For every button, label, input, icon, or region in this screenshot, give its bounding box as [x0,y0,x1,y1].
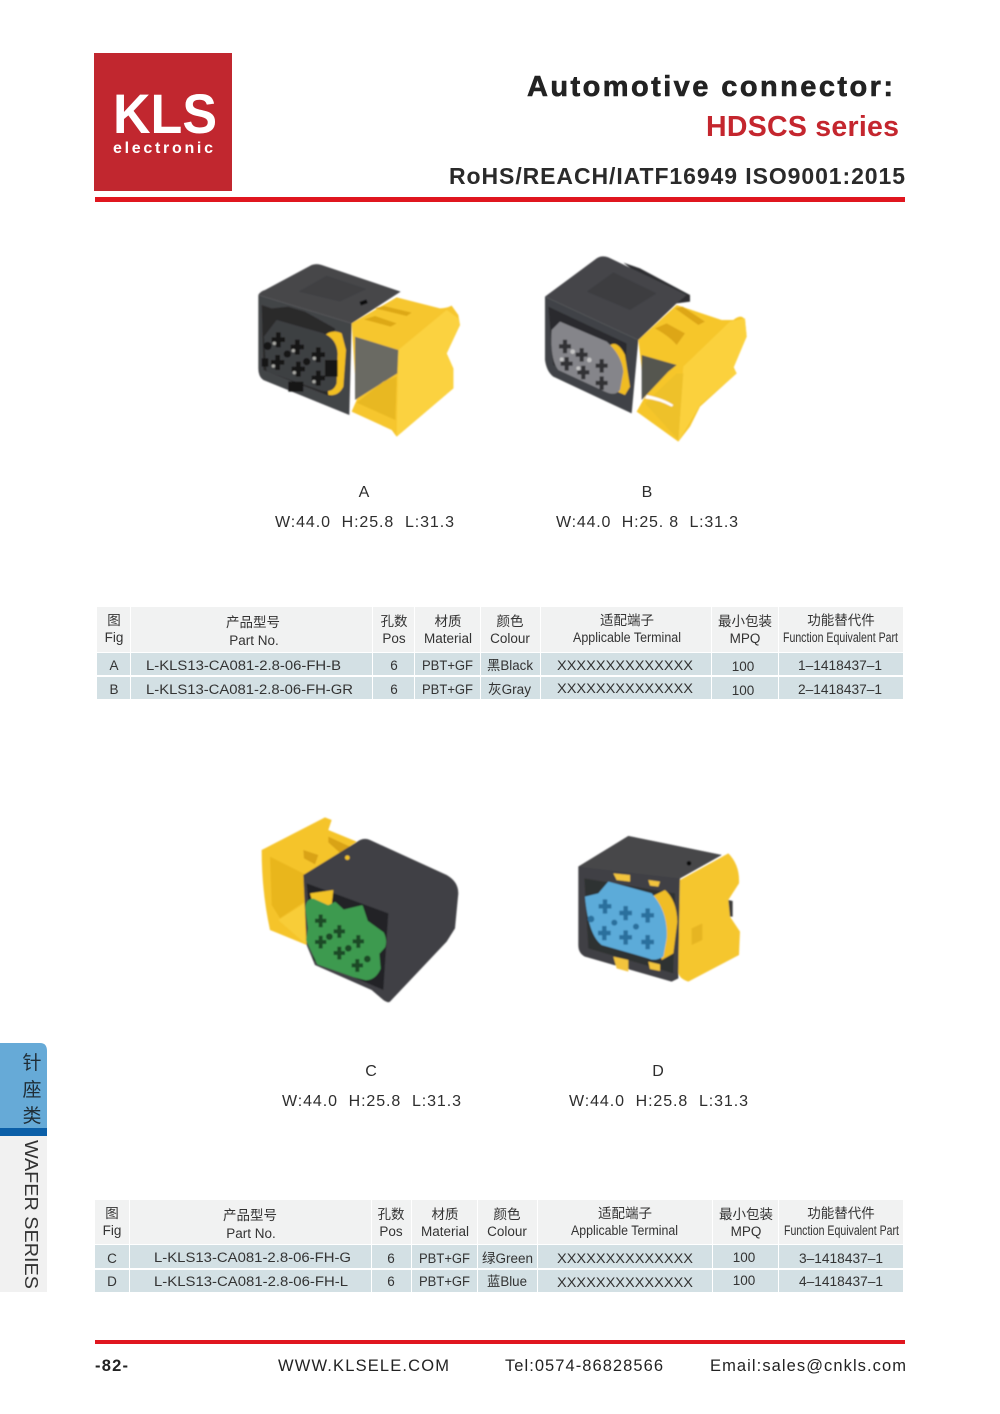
table header: 孔数 [378,1207,405,1222]
table header: Colour [487,1224,527,1239]
table row D: PBT+GF [419,1274,470,1289]
table header: Material [421,1224,469,1239]
table header: 材质 [434,614,462,629]
table header: 孔数 [380,614,408,629]
caption: C [282,1063,461,1110]
table row A: PBT+GF [422,658,473,673]
table header: 适配端子 [598,1206,652,1221]
table row D: 4–1418437–1 [799,1274,883,1289]
table header: Applicable Terminal [571,1223,678,1238]
table row B: 6 [390,682,398,697]
footer: telephone: Tel:0574-86828566 [505,1357,663,1375]
caption: B: W:44.0 H:25. 8 L:31.3 [556,514,738,531]
table header: 颜色 [496,613,524,629]
table row A: 6 [390,658,398,673]
table row D: 蓝Blue [487,1274,527,1289]
table header: 产品型号 [223,1208,277,1223]
table row A [109,658,882,674]
table header: 材质 [432,1207,458,1222]
footer: email: Email:sales@cnkls.com [710,1357,906,1375]
product photo: connector C [262,817,458,1002]
table row C: L-KLS13-CA081-2.8-06-FH-G [154,1250,351,1265]
product photo: connector A [258,264,460,437]
table header: Fig [105,630,123,645]
table header [105,613,898,648]
table header: 最小包装 [718,614,772,629]
caption: D [569,1063,748,1110]
caption: C: C [365,1063,377,1080]
caption: B [556,484,738,531]
side tab: wafer series: 座 [22,1079,42,1101]
table row D: L-KLS13-CA081-2.8-06-FH-L [154,1274,349,1289]
logo: electronic [113,140,213,157]
table row D [107,1273,883,1290]
side tab: wafer series: 针 [22,1052,42,1074]
table row B: 100 [732,683,754,698]
table row A: XXXXXXXXXXXXXX [557,658,693,673]
table row C: XXXXXXXXXXXXXX [557,1251,693,1266]
side tab: wafer series: WAFER SERIES [21,1140,42,1289]
table header [103,1206,899,1241]
table row A: 1–1418437–1 [798,658,882,673]
table row C: 6 [387,1251,395,1266]
table row A: A [109,658,119,673]
table header: 产品型号 [226,615,280,630]
table header: Pos [379,1224,403,1239]
table header: 功能替代件 [807,613,875,628]
table row C: 绿Green [482,1251,533,1266]
table row B: B [109,682,119,697]
table row B: XXXXXXXXXXXXXX [557,681,693,696]
footer: website: WWW.KLSELE.COM [278,1357,449,1375]
caption: D: W:44.0 H:25.8 L:31.3 [569,1093,748,1110]
table row C [107,1250,883,1266]
table row C: C [107,1251,117,1266]
table row B [109,681,882,698]
table row A: L-KLS13-CA081-2.8-06-FH-B [146,658,341,673]
table header: 最小包装 [719,1207,773,1222]
caption: D: D [652,1063,664,1080]
logo: KLS [113,82,217,145]
table header: MPQ [731,1224,761,1239]
product photo: connector D [578,836,740,982]
table row D: XXXXXXXXXXXXXX [557,1275,693,1290]
table row C: 100 [733,1250,755,1265]
title: Automotive connector: [527,71,893,103]
table header: 图 [105,1206,119,1221]
table header: Part No. [229,633,279,648]
caption: A: W:44.0 H:25.8 L:31.3 [275,514,454,531]
certifications: RoHS/REACH/IATF16949 ISO9001:2015 [449,163,905,189]
table row A: 100 [732,659,754,674]
table: parts A and B [97,607,903,699]
table header: 功能替代件 [807,1206,875,1221]
table row D: D [107,1274,117,1289]
footer: page number: -82- [95,1357,128,1375]
product photo: connector B [545,256,747,442]
side tab: wafer series: 类 [22,1105,42,1127]
table header: Fig [103,1223,121,1238]
table row D: 100 [733,1273,755,1288]
table row C: 3–1418437–1 [799,1251,883,1266]
table row B: PBT+GF [422,682,473,697]
table row B: L-KLS13-CA081-2.8-06-FH-GR [146,682,353,697]
table header: Function Equivalent Part [784,1223,899,1238]
table row B: 灰Gray [488,682,531,697]
table header: 适配端子 [600,613,654,628]
caption: B: B [642,484,652,501]
table header: 图 [107,613,121,628]
table header: Function Equivalent Part [783,630,898,645]
caption: A: A [359,484,370,501]
side tab: wafer series [0,1043,47,1292]
table row C: PBT+GF [419,1251,470,1266]
table header: Part No. [226,1226,276,1241]
table header: Material [424,631,472,646]
table row A: 黑Black [487,658,533,673]
table header: Colour [490,631,530,646]
table header: Applicable Terminal [573,630,681,645]
table row D: 6 [387,1274,395,1289]
table row B: 2–1418437–1 [798,682,882,697]
caption: A [275,484,454,531]
table: parts C and D [95,1200,903,1292]
subtitle: series name: HDSCS series [706,111,899,143]
table header: MPQ [730,631,760,646]
table header: Pos [382,631,406,646]
caption: C: W:44.0 H:25.8 L:31.3 [282,1093,461,1110]
table header: 颜色 [494,1206,520,1222]
logo [94,53,232,191]
